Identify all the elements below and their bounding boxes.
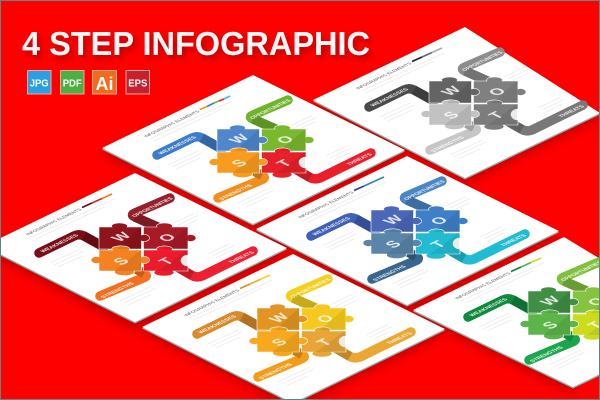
slide: yellow orange: S <box>267 337 292 348</box>
slide: multicolour <box>102 75 405 226</box>
slide: multicolour: T <box>273 158 296 169</box>
header: INFOGRAPHIC ELEMENTS <box>453 272 512 300</box>
slide: multicolour: THREATS <box>346 152 375 167</box>
slide: multicolour: OPPORTUNITIES <box>249 99 293 120</box>
slide: grayscale: OPPORTUNITIES <box>461 51 505 72</box>
slide: multicolour: S <box>227 158 252 169</box>
slide: yellow orange: O <box>313 313 339 325</box>
slide: grayscale: W <box>438 84 466 98</box>
slide: dark red: WEAKNESSES <box>40 233 81 254</box>
slide: blue: OPPORTUNITIES <box>403 180 447 201</box>
slide: grayscale: T <box>485 110 508 121</box>
icon: JPG <box>28 70 51 94</box>
icon: PDF <box>60 70 84 94</box>
slide: yellow orange: THREATS <box>386 331 415 346</box>
slide: yellow orange: STRENGTHS <box>258 363 295 380</box>
slide: yellow orange: OPPORTUNITIES <box>289 278 333 299</box>
slide: blue: O <box>427 215 453 227</box>
header: INFOGRAPHIC ELEMENTS <box>24 208 83 236</box>
slide: blue: T <box>427 239 450 250</box>
slide: dark red: W <box>108 230 136 244</box>
slide: dark red: THREATS <box>228 250 257 265</box>
icon: PDF: PDF <box>63 78 82 90</box>
slide: blue: W <box>380 213 408 227</box>
slide: grayscale <box>313 27 600 180</box>
header: INFOGRAPHIC ELEMENTS <box>296 191 355 219</box>
slide: yellow orange: W <box>266 311 294 325</box>
slide: multicolour: O <box>273 134 299 146</box>
slide: grayscale: WEAKNESSES <box>370 87 411 108</box>
slide: green: STRENGTHS <box>529 346 566 363</box>
slide: yellow orange <box>142 254 445 400</box>
slide: dark red: O <box>155 232 181 244</box>
slide: multicolour: STRENGTHS <box>218 184 255 201</box>
slide: blue: THREATS <box>500 233 529 248</box>
slide: grayscale: STRENGTHS <box>430 136 467 153</box>
slide: dark red: S <box>109 256 134 267</box>
slide: green: S <box>538 320 563 331</box>
slide: blue: S <box>381 239 406 250</box>
slide: dark red <box>0 173 287 324</box>
title: 4 STEP INFOGRAPHIC <box>22 25 370 62</box>
slide: green <box>413 237 600 388</box>
slide: multicolour: WEAKNESSES <box>158 135 199 156</box>
icon: EPS: EPS <box>128 78 148 90</box>
slide: green: W <box>537 294 565 308</box>
slide: blue: STRENGTHS <box>372 265 409 282</box>
header: INFOGRAPHIC ELEMENTS <box>182 289 241 317</box>
icon: JPG: JPG <box>30 78 49 90</box>
slide: blue: WEAKNESSES <box>312 216 353 237</box>
slide: grayscale: THREATS <box>558 104 587 119</box>
icon: Ai: Ai <box>96 74 114 94</box>
icon: EPS <box>126 70 150 94</box>
slide: yellow orange: WEAKNESSES <box>198 314 239 335</box>
slide: dark red: STRENGTHS <box>100 282 137 299</box>
slide: yellow orange: T <box>313 337 336 348</box>
header: INFOGRAPHIC ELEMENTS <box>142 110 201 138</box>
slide: blue <box>256 156 559 306</box>
slide: dark red: T <box>155 256 178 267</box>
slide: multicolour: W <box>226 132 254 146</box>
slide: green: WEAKNESSES <box>469 297 510 318</box>
slide: grayscale: S <box>439 110 464 121</box>
header: INFOGRAPHIC ELEMENTS <box>354 62 413 90</box>
slide: dark red: OPPORTUNITIES <box>131 197 175 218</box>
slide: grayscale: O <box>485 86 511 98</box>
icon: Ai <box>92 70 116 94</box>
